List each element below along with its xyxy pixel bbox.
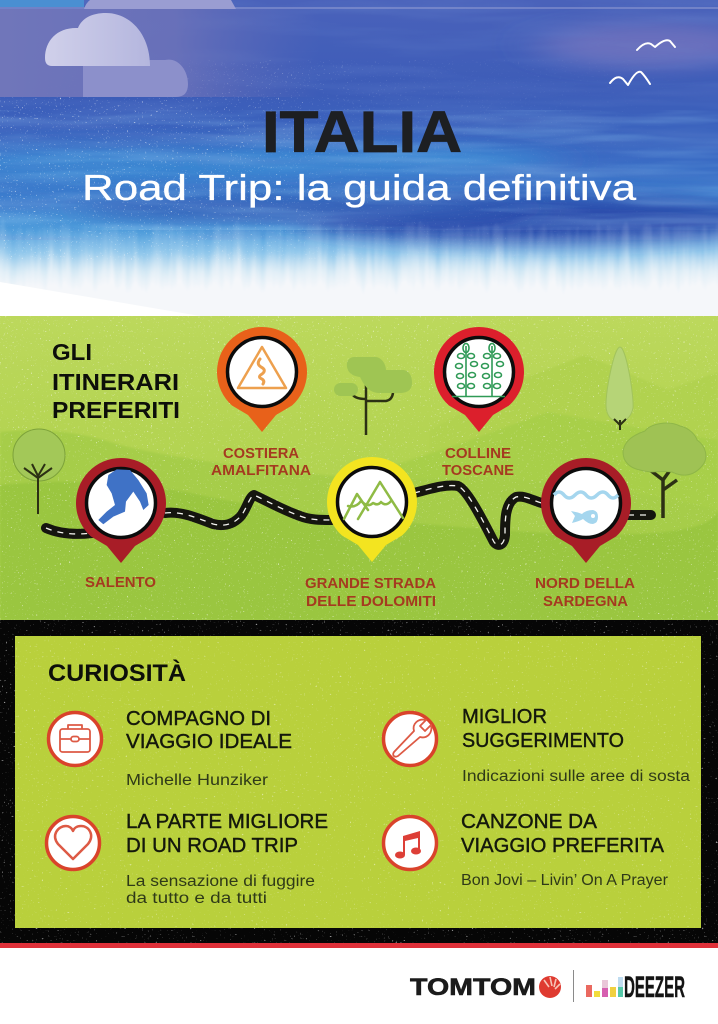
icon: heart — [46, 816, 100, 870]
heading: curiosita: CURIOSITÀ — [48, 659, 186, 687]
label: grande strada delle dolomiti — [305, 576, 437, 610]
item: la parte migliore — [46, 811, 328, 907]
label: colline toscane: TOSCANE — [442, 463, 514, 479]
tree: cypress — [606, 347, 633, 430]
logo: deezer — [586, 971, 685, 1004]
item: compagno di viaggio: COMPAGNO DI — [126, 708, 271, 730]
item: canzone da viaggio — [384, 811, 668, 889]
icon: mountains — [344, 482, 403, 519]
label: salento: SALENTO — [85, 575, 156, 591]
panel: black starfield border — [0, 620, 718, 943]
label: colline toscane — [442, 446, 514, 479]
item: compagno di viaggio: VIAGGIO IDEALE — [126, 731, 292, 753]
icon: vines — [452, 344, 505, 396]
pin: costiera amalfitana — [217, 327, 307, 432]
pin: grande strada delle dolomiti — [327, 457, 417, 562]
item: la parte migliore: La sensazione di fuggire — [126, 873, 315, 890]
item: la parte migliore: LA PARTE MIGLIORE — [126, 811, 328, 833]
label: grande strada delle dolomiti: GRANDE STRADA — [305, 576, 437, 592]
item: la parte migliore: DI UN ROAD TRIP — [126, 835, 298, 857]
icon: waves and fish — [554, 492, 618, 524]
decorative cloud band with clouds — [0, 0, 320, 97]
logo divider — [573, 970, 574, 1002]
title: ITALIA — [262, 100, 462, 165]
item: miglior suggerimento: MIGLIOR — [462, 706, 547, 728]
pin: nord della sardegna — [541, 458, 631, 563]
pin: salento — [76, 458, 166, 563]
logo: tomtom: TOMTOM — [410, 974, 536, 1001]
heading: gli itinerari preferiti: PREFERITI — [52, 397, 180, 423]
item: canzone da viaggio: Bon Jovi – Livin’ On A Prayer — [461, 872, 668, 889]
icon: italy map — [98, 469, 149, 524]
tree: left round — [13, 429, 65, 514]
label: grande strada delle dolomiti: DELLE DOLOMITI — [306, 594, 436, 610]
item: miglior suggerimento: SUGGERIMENTO — [462, 730, 624, 752]
icon: birds — [610, 40, 675, 85]
icon: music note — [384, 816, 436, 870]
tree: middle — [334, 357, 412, 435]
icon: wrench — [384, 712, 436, 766]
heading: gli itinerari preferiti: ITINERARI — [52, 369, 179, 395]
panel: itinerari preferiti landscape — [0, 316, 718, 620]
item: canzone da viaggio: VIAGGIO PREFERITA — [461, 835, 665, 857]
item: miglior suggerimento — [384, 706, 690, 785]
panel: watercolor sky header — [0, 0, 718, 326]
heading: gli itinerari preferiti: GLI — [52, 339, 92, 365]
heading: gli itinerari preferiti — [52, 339, 180, 423]
item: compagno di viaggio: Michelle Hunziker — [126, 772, 268, 789]
item: miglior suggerimento: Indicazioni sulle aree di sosta — [462, 768, 690, 785]
panel: curiosita — [15, 636, 701, 928]
label: costiera amalfitana: AMALFITANA — [211, 463, 312, 479]
icon: winding road sign — [238, 347, 286, 388]
subtitle: Road Trip: la guida definitiva — [82, 167, 637, 208]
label: costiera amalfitana: COSTIERA — [223, 446, 300, 462]
red divider band — [0, 943, 718, 948]
tree: right — [623, 423, 706, 518]
label: nord della sardegna: NORD DELLA — [535, 576, 636, 592]
item: compagno di viaggio — [48, 708, 292, 789]
road — [46, 486, 651, 545]
label: nord della sardegna: SARDEGNA — [543, 594, 629, 610]
item: canzone da viaggio: CANZONE DA — [461, 811, 598, 833]
label: nord della sardegna — [535, 576, 636, 610]
item: la parte migliore: da tutto e da tutti — [126, 890, 267, 907]
pin: colline toscane — [434, 327, 524, 432]
label: colline toscane: COLLINE — [445, 446, 511, 462]
label: costiera amalfitana — [211, 446, 312, 479]
icon: briefcase — [48, 712, 102, 766]
